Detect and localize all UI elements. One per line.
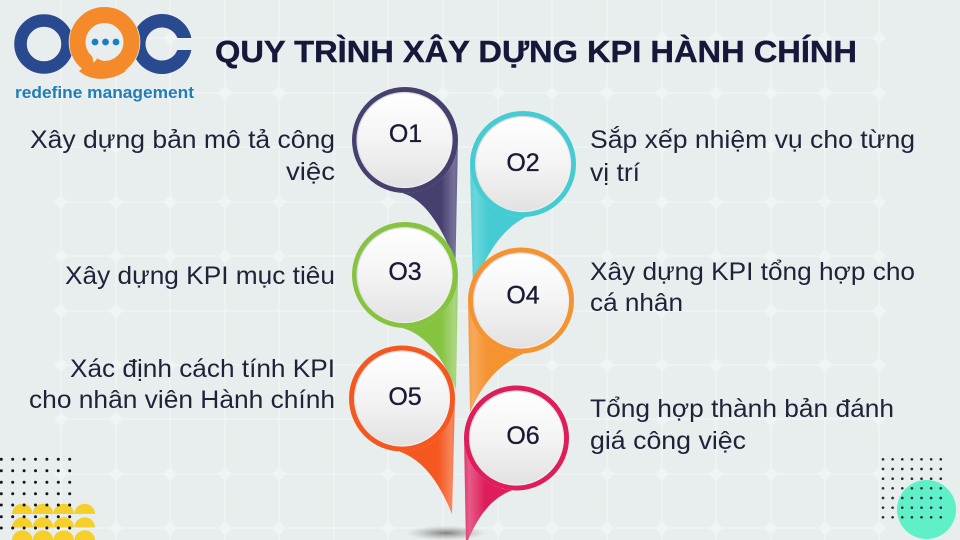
- text: step 2 description: Sắp xếp nhiệm vụ cho từng: [590, 125, 915, 154]
- text: step 5 description: Xác định cách tính KPI: [70, 355, 335, 383]
- text: step 6 description: [590, 395, 894, 455]
- text: step 5 description: [29, 355, 335, 414]
- pin 01: O1: [389, 120, 422, 148]
- title: QUY TRÌNH XÂY DỰNG KPI HÀNH CHÍNH: [215, 33, 857, 69]
- pin 04: [468, 248, 574, 412]
- pin 02: O2: [506, 149, 540, 177]
- text: step 4 description: cá nhân: [590, 289, 683, 317]
- pin 05: O5: [388, 383, 422, 411]
- pin 03: O3: [388, 258, 422, 286]
- text: step 5 description: cho nhân viên Hành chính: [29, 386, 335, 414]
- logo: OOC redefine management: redefine management: [15, 83, 194, 102]
- pin 02: [470, 111, 576, 290]
- text: step 1 description: [30, 126, 335, 186]
- text: step 2 description: [590, 125, 915, 187]
- pin 06: O6: [506, 422, 540, 450]
- text: step 1 description: Xây dựng bản mô tả công: [30, 126, 335, 154]
- decoration: teal circle and dots, bottom right: [883, 459, 956, 539]
- shadow under pins: [406, 526, 486, 540]
- text: step 2 description: vị trí: [590, 159, 640, 187]
- text: step 4 description: [590, 258, 915, 317]
- logo: OOC redefine management: [15, 6, 194, 102]
- text: step 6 description: giá công việc: [590, 427, 746, 455]
- pin 01: [352, 87, 458, 262]
- pin 05: [349, 346, 455, 514]
- pin 03: [352, 222, 458, 390]
- text: step 1 description: việc: [286, 158, 335, 186]
- pin 06: [464, 386, 569, 540]
- text: step 6 description: Tổng hợp thành bản đánh: [590, 395, 894, 423]
- decoration: yellow half circles and dots, bottom left: [1, 459, 95, 540]
- pin 04: O4: [506, 282, 540, 310]
- text: step 4 description: Xây dựng KPI tổng hợp cho: [590, 258, 915, 286]
- text: step 3 description: Xây dựng KPI mục tiêu: [65, 262, 335, 290]
